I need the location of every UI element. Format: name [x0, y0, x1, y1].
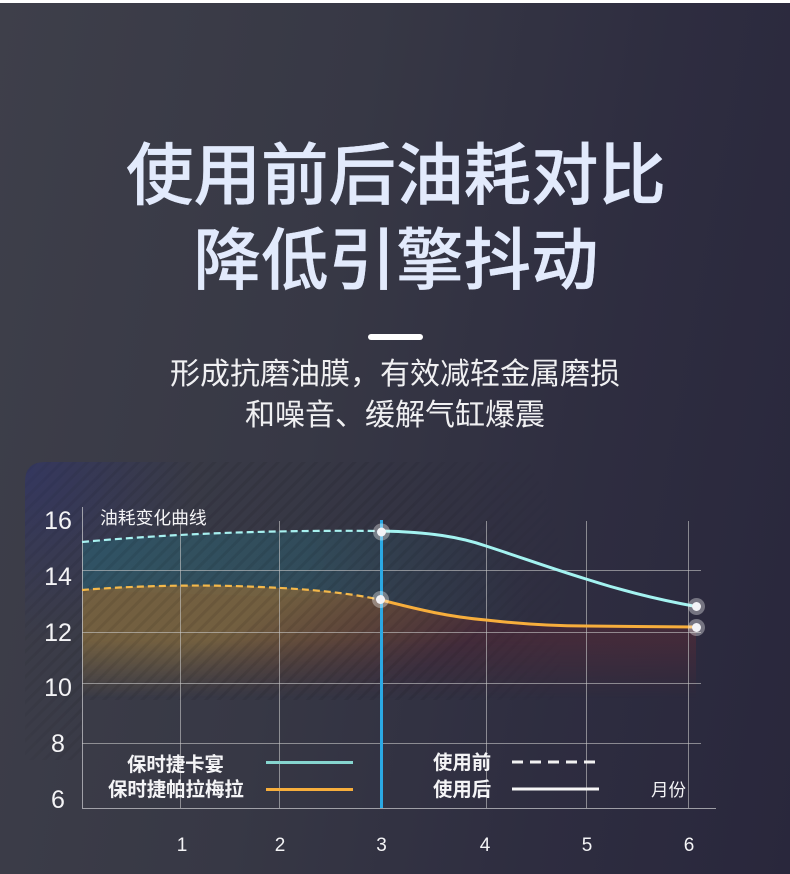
y axis labels — [44, 507, 72, 814]
area: before-curve teal — [82, 531, 586, 626]
x axis labels: 6 — [684, 835, 694, 856]
y axis labels: 14 — [44, 563, 72, 591]
y axis labels: 16 — [44, 507, 72, 535]
accent bar — [368, 334, 423, 340]
legend: before/after: 使用后 — [433, 779, 491, 801]
legend: models: 保时捷卡宴 — [127, 753, 224, 776]
orange curve before (dashed) — [82, 586, 381, 600]
teal curve before (dashed) — [82, 531, 381, 542]
chart corner glow — [25, 462, 200, 640]
x axis unit: 月份 — [651, 780, 686, 800]
data markers — [372, 524, 705, 636]
x axis labels: 1 — [177, 835, 187, 856]
hatch pattern — [132, 586, 322, 648]
x axis labels — [177, 835, 694, 856]
area: orange — [82, 586, 696, 700]
chart caption: 油耗变化曲线 — [100, 508, 207, 528]
subtitle line 1: 形成抗磨油膜，有效减轻金属磨损 — [170, 358, 620, 391]
subtitle line 2: 和噪音、缓解气缸爆震 — [245, 399, 545, 432]
title line 1: 使用前后油耗对比 — [126, 139, 666, 214]
teal curve after (solid) — [381, 531, 696, 606]
y axis labels: 8 — [51, 730, 65, 758]
legend: before/after: 使用前 — [433, 752, 491, 774]
x axis labels: 2 — [275, 835, 285, 856]
y axis labels: 10 — [44, 674, 72, 702]
x axis labels: 5 — [582, 835, 592, 856]
cursor line month 3 — [380, 520, 383, 808]
y axis labels: 12 — [44, 619, 72, 647]
chart — [25, 462, 716, 851]
x axis labels: 4 — [480, 835, 491, 856]
grid lines — [82, 507, 716, 808]
x axis labels: 3 — [376, 835, 387, 856]
legend: models — [108, 753, 353, 801]
orange curve after (solid) — [381, 600, 696, 627]
y axis labels: 6 — [51, 786, 65, 814]
title line 2: 降低引擎抖动 — [193, 224, 598, 299]
legend: before/after — [433, 752, 599, 801]
legend: models: 保时捷帕拉梅拉 — [108, 778, 244, 801]
